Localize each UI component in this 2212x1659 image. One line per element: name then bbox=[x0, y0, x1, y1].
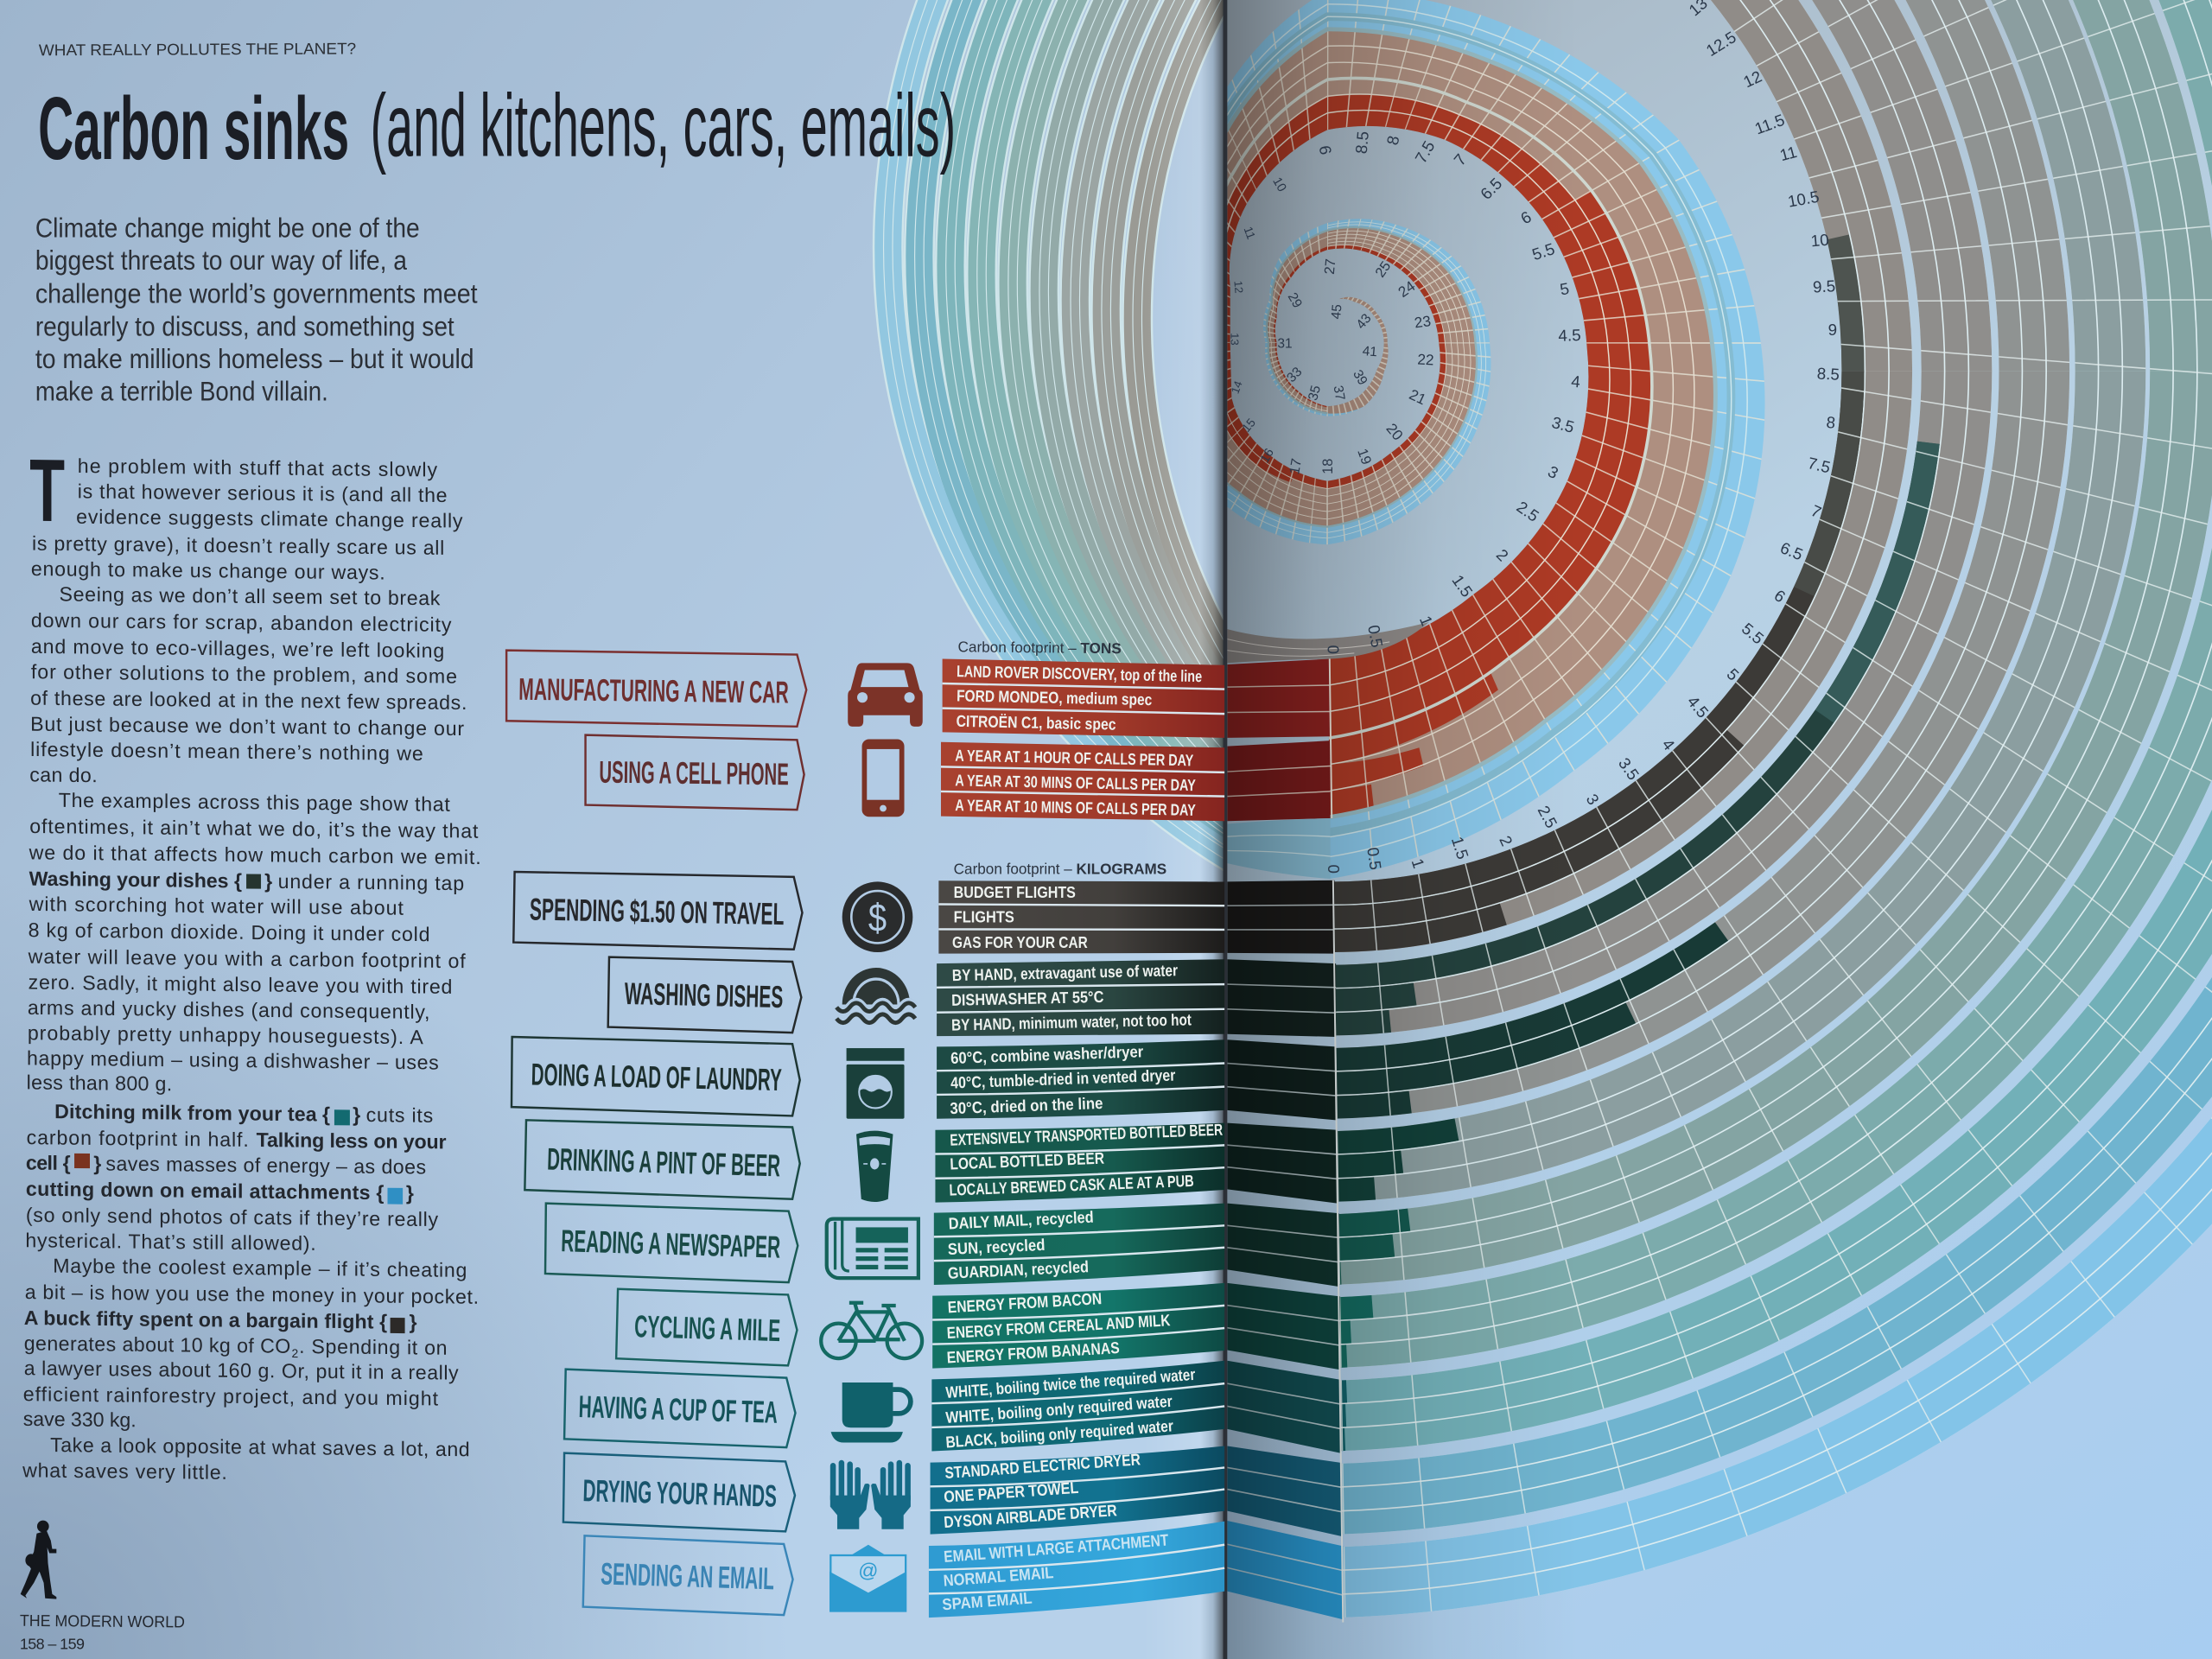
row: washing dishes bbox=[937, 959, 1224, 1036]
body text column: is that however serious it is (and all the bbox=[78, 480, 448, 506]
scale numbers: tons: 20 bbox=[1382, 420, 1407, 443]
body text column: evidence suggests climate change really bbox=[76, 505, 463, 532]
label bars bbox=[929, 658, 1224, 1618]
scale numbers: kilograms bbox=[1325, 0, 1840, 874]
scale numbers: tons: 12 bbox=[1231, 280, 1246, 294]
icon: email envelope: @ bbox=[858, 1559, 878, 1581]
row: tea bbox=[931, 1361, 1224, 1452]
intro text: challenge the world’s governments meet bbox=[35, 277, 478, 308]
row: hands: DYSON AIRBLADE DRYER bbox=[944, 1501, 1118, 1531]
body text column: { bbox=[376, 1181, 384, 1204]
scale numbers: kilograms: 7.5 bbox=[1806, 454, 1832, 476]
scale numbers: tons: 7 bbox=[1450, 150, 1470, 169]
row: email: SPAM EMAIL bbox=[942, 1589, 1033, 1613]
row: cycling bbox=[932, 1283, 1224, 1369]
intro text: make a terrible Bond villain. bbox=[35, 376, 328, 407]
scale numbers: tons: 45 bbox=[1329, 303, 1344, 320]
row: tea: WHITE, boiling twice the required water bbox=[945, 1365, 1197, 1402]
body text column: a bit – is how you use the money in your pocket. bbox=[25, 1281, 479, 1308]
scale numbers: tons: 24 bbox=[1395, 276, 1419, 301]
body text column: cutting down on email attachments bbox=[26, 1178, 371, 1204]
title: (and kitchens, cars, emails) bbox=[371, 76, 956, 175]
sign: hands: DRYING YOUR HANDS bbox=[582, 1472, 777, 1514]
scale numbers: tons: 6 bbox=[1517, 207, 1535, 227]
drop cap: T bbox=[29, 441, 65, 540]
bars: tons rows between spine and zero bbox=[1227, 622, 1429, 879]
bar fade near the top of long bars bbox=[1794, 372, 1940, 722]
body text column: for other solutions to the problem, and some bbox=[31, 660, 457, 688]
tick lines: tons spiral bbox=[975, 0, 1680, 696]
row: spending on travel: FLIGHTS bbox=[954, 907, 1014, 925]
body text column: Maybe the coolest example – if it’s cheating bbox=[53, 1255, 467, 1281]
scale numbers: tons: 0 bbox=[1324, 645, 1342, 654]
intro text: biggest threats to our way of life, a bbox=[35, 245, 407, 276]
sign: laundry bbox=[512, 1037, 800, 1116]
row: manufacturing a new car bbox=[943, 658, 1224, 738]
scale numbers: kilograms: 12 bbox=[1740, 67, 1764, 91]
scale numbers: kilograms: 9.5 bbox=[1812, 276, 1836, 296]
body text column bbox=[22, 441, 481, 1486]
scale numbers: kilograms: 11 bbox=[1777, 143, 1799, 164]
scale numbers: tons: 33 bbox=[1284, 365, 1305, 385]
sign: email: SENDING AN EMAIL bbox=[601, 1555, 775, 1596]
row: hands: ONE PAPER TOWEL bbox=[944, 1478, 1079, 1506]
row: newspaper: DAILY MAIL, recycled bbox=[948, 1208, 1094, 1233]
chart: kilogram rings, lower arcs bbox=[1334, 371, 2212, 1618]
bars: kilogram values bbox=[1334, 372, 1940, 1452]
sign: tea: HAVING A CUP OF TEA bbox=[578, 1389, 778, 1430]
scale numbers: tons: 10 bbox=[1269, 175, 1288, 194]
icon: hands bbox=[830, 1460, 911, 1529]
icon: car bbox=[848, 663, 923, 727]
body text column: } bbox=[264, 870, 272, 893]
sign: manufacturing a new car bbox=[506, 651, 806, 727]
body text column: { bbox=[322, 1103, 330, 1126]
icon: bicycle bbox=[821, 1303, 922, 1358]
row: email: EMAIL WITH LARGE ATTACHMENT bbox=[943, 1530, 1169, 1566]
row: email: NORMAL EMAIL bbox=[943, 1563, 1054, 1590]
body text column: oftentimes, it ain’t what we do, it’s the way that bbox=[29, 815, 479, 842]
body text column: saves masses of energy – as does bbox=[105, 1152, 426, 1179]
body text column: efficient rainforestry project, and you might bbox=[23, 1382, 439, 1409]
body text column: Take a look opposite at what saves a lot, and bbox=[50, 1433, 470, 1460]
row: newspaper: SUN, recycled bbox=[947, 1236, 1046, 1258]
body text column: Washing your dishes bbox=[29, 868, 228, 892]
body text column: zero. Sadly, it might also leave you with tired bbox=[29, 971, 452, 998]
scale numbers: kilograms: 8 bbox=[1826, 413, 1836, 432]
row: washing dishes: BY HAND, minimum water, not too hot bbox=[951, 1010, 1192, 1034]
scale numbers: kilograms: 0 bbox=[1325, 864, 1343, 874]
row: manufacturing a new car: CITROËN C1, basic spec bbox=[956, 712, 1116, 734]
row: using a cell phone: A YEAR AT 1 HOUR OF CALLS PER DAY bbox=[955, 747, 1194, 769]
body text column: we do it that affects how much carbon we emit. bbox=[29, 841, 481, 868]
bars: red tons values bbox=[1211, 94, 1652, 817]
body text column: (so only send photos of cats if they’re really bbox=[26, 1204, 439, 1230]
body text column: { bbox=[63, 1152, 71, 1174]
tick lines: kilogram rings bbox=[1334, 0, 2212, 1618]
body text column: what saves very little. bbox=[22, 1459, 227, 1484]
scale numbers: tons: 2.5 bbox=[1513, 498, 1542, 525]
scale numbers: tons: 18 bbox=[1320, 459, 1336, 474]
body text column: hysterical. That’s still allowed). bbox=[25, 1229, 316, 1255]
scale numbers: tons: 0.5 bbox=[1364, 624, 1386, 649]
scale numbers: kilograms: 12.5 bbox=[1703, 28, 1739, 60]
row: laundry: 60°C, combine washer/dryer bbox=[950, 1042, 1144, 1067]
row: tea: WHITE, boiling only required water bbox=[945, 1392, 1173, 1427]
scale numbers: tons: 37 bbox=[1331, 385, 1347, 402]
scale numbers: tons: 31 bbox=[1277, 337, 1293, 352]
chart: right page spiral bbox=[1227, 0, 2212, 1659]
row: hands bbox=[931, 1446, 1224, 1535]
scale numbers: tons: 2 bbox=[1493, 545, 1512, 564]
scale numbers: kilograms: 5.5 bbox=[1738, 620, 1767, 647]
body text column: and move to eco-villages, we’re left looking bbox=[31, 635, 444, 662]
body text column: of these are looked at in the next few spreads. bbox=[30, 687, 467, 714]
body text column: { bbox=[379, 1311, 387, 1333]
title bbox=[38, 76, 956, 178]
scale numbers: tons: 8.5 bbox=[1352, 130, 1372, 155]
body text column: Talking less on your bbox=[257, 1128, 447, 1153]
scale numbers: tons: 16 bbox=[1258, 447, 1277, 466]
scale numbers: kilograms: 4 bbox=[1658, 735, 1678, 753]
scale numbers: tons: 3.5 bbox=[1550, 413, 1576, 436]
body text column: A buck fifty spent on a bargain flight bbox=[24, 1306, 374, 1332]
body text column: Seeing as we don’t all seem set to break bbox=[60, 582, 441, 609]
body text column: } bbox=[409, 1311, 417, 1333]
signs bbox=[506, 651, 806, 1615]
scale numbers: tons: 4 bbox=[1571, 372, 1581, 391]
ring lines: tons spiral bbox=[1184, 4, 1747, 857]
scale numbers: tons: 15 bbox=[1239, 416, 1258, 435]
scale numbers: kilograms: 1 bbox=[1408, 856, 1428, 870]
body text column: } bbox=[93, 1152, 101, 1174]
body text column: under a running tap bbox=[278, 870, 464, 894]
sign: beer: DRINKING A PINT OF BEER bbox=[547, 1141, 781, 1183]
scale numbers: kilograms: 10.5 bbox=[1786, 188, 1821, 211]
scale numbers: kilograms: 5 bbox=[1723, 664, 1743, 684]
scale numbers: kilograms: 3.5 bbox=[1615, 754, 1643, 784]
swatch: flight bbox=[391, 1318, 405, 1333]
row: beer bbox=[935, 1121, 1224, 1203]
sign: hands bbox=[563, 1453, 795, 1531]
scale numbers: tons: 39 bbox=[1350, 367, 1370, 388]
body text column: enough to make us change our ways. bbox=[31, 557, 385, 584]
scale numbers: kilograms: 6 bbox=[1771, 586, 1789, 606]
icon: dish in water bbox=[836, 968, 915, 1023]
header: carbon footprint tons: Carbon footprint – TONS bbox=[958, 638, 1122, 657]
body text column: with scorching hot water will use about bbox=[29, 893, 404, 919]
footer: page numbers: 158 – 159 bbox=[20, 1636, 85, 1653]
scale numbers: kilograms: 6.5 bbox=[1777, 538, 1805, 563]
row: laundry: 30°C, dried on the line bbox=[950, 1094, 1103, 1117]
icon: walking man bbox=[21, 1521, 56, 1599]
scale numbers: kilograms: 11.5 bbox=[1752, 111, 1787, 138]
body text column: 2 bbox=[291, 1346, 298, 1360]
scale numbers: kilograms: 0.5 bbox=[1363, 846, 1385, 871]
sign: beer bbox=[524, 1120, 800, 1199]
row: newspaper: GUARDIAN, recycled bbox=[947, 1257, 1089, 1282]
body text column: a lawyer uses about 160 g. Or, put it in a really bbox=[24, 1357, 459, 1384]
sign: email bbox=[583, 1535, 793, 1615]
scale numbers: tons: 1 bbox=[1416, 613, 1436, 628]
scale numbers: tons: 35 bbox=[1306, 384, 1324, 402]
row: manufacturing a new car: FORD MONDEO, medium spec bbox=[957, 686, 1153, 709]
bars: kilogram rows between spine and zero bbox=[1227, 880, 1343, 1623]
sign: laundry: DOING A LOAD OF LAUNDRY bbox=[531, 1057, 782, 1097]
scale numbers: tons: 5 bbox=[1559, 279, 1571, 299]
body text column: } bbox=[406, 1182, 414, 1205]
body text column: { bbox=[234, 869, 242, 892]
body text column: happy medium – using a dishwasher – uses bbox=[27, 1046, 439, 1074]
row: hands: STANDARD ELECTRIC DRYER bbox=[944, 1450, 1141, 1482]
background: right page bbox=[1226, 0, 2212, 1659]
swatch: tea bbox=[334, 1109, 350, 1125]
sign: washing dishes bbox=[608, 957, 801, 1033]
scale numbers: tons: 17 bbox=[1287, 457, 1305, 475]
row: spending on travel bbox=[938, 880, 1224, 954]
scale numbers: tons: 27 bbox=[1322, 258, 1338, 275]
scale numbers: kilograms: 10 bbox=[1810, 231, 1829, 250]
body text column: carbon footprint in half. bbox=[27, 1126, 249, 1151]
sign: tea bbox=[564, 1370, 795, 1447]
sign: manufacturing a new car: MANUFACTURING A NEW CAR bbox=[518, 671, 789, 710]
body text column: water will leave you with a carbon footprint of bbox=[28, 945, 466, 972]
spine shadow on chart bbox=[1227, 0, 1580, 1659]
icon: coin: $ bbox=[868, 896, 887, 940]
scale numbers: tons: 19 bbox=[1354, 447, 1374, 467]
body text column: generates about 10 kg of CO bbox=[24, 1332, 290, 1357]
row: using a cell phone: A YEAR AT 10 MINS OF CALLS PER DAY bbox=[955, 796, 1196, 819]
scale numbers: tons: 11 bbox=[1242, 225, 1259, 241]
body text column: The examples across this page show that bbox=[59, 789, 450, 816]
scale numbers: tons: 43 bbox=[1354, 311, 1375, 332]
kicker: WHAT REALLY POLLUTES THE PLANET? bbox=[39, 39, 356, 59]
header: carbon footprint kilograms: Carbon footprint – KILOGRAMS bbox=[954, 861, 1166, 878]
scale numbers: tons: 3 bbox=[1545, 462, 1561, 482]
icon: cup of tea bbox=[831, 1382, 911, 1443]
scale numbers: tons bbox=[1229, 130, 1581, 654]
row: washing dishes: DISHWASHER AT 55°C bbox=[951, 988, 1104, 1009]
body text column: save 330 kg. bbox=[23, 1408, 137, 1431]
body text column: } bbox=[353, 1103, 360, 1126]
body text column: cell bbox=[26, 1151, 58, 1174]
icon: newspaper bbox=[827, 1219, 918, 1278]
scale numbers: tons: 21 bbox=[1407, 385, 1429, 408]
chart: kilogram rings, upper arcs bbox=[1711, 0, 2212, 372]
scale numbers: tons: 14 bbox=[1229, 379, 1245, 396]
sign: cycling bbox=[616, 1289, 797, 1365]
row: beer: LOCAL BOTTLED BEER bbox=[950, 1149, 1105, 1173]
row: spending on travel: BUDGET FLIGHTS bbox=[954, 883, 1076, 901]
icon: coin bbox=[842, 881, 912, 952]
icon: washing machine bbox=[847, 1048, 905, 1119]
scale numbers: tons: 41 bbox=[1362, 344, 1378, 359]
icon: pint of beer bbox=[856, 1131, 893, 1202]
row: cycling: ENERGY FROM BANANAS bbox=[946, 1338, 1120, 1366]
swatch: dishes bbox=[246, 874, 261, 889]
row: email bbox=[929, 1522, 1224, 1618]
scale numbers: tons: 25 bbox=[1372, 258, 1394, 280]
scale numbers: tons: 29 bbox=[1285, 290, 1305, 310]
scale numbers: kilograms: 7 bbox=[1808, 501, 1824, 522]
body text column: arms and yucky dishes (and consequently, bbox=[28, 996, 429, 1023]
swatch: email bbox=[387, 1188, 403, 1205]
scale numbers: tons: 7.5 bbox=[1411, 137, 1439, 166]
background: left page bbox=[0, 0, 1226, 1659]
scale numbers: tons: 22 bbox=[1417, 351, 1434, 368]
icon: phone bbox=[862, 740, 905, 817]
icon: email envelope bbox=[830, 1545, 906, 1611]
scale numbers: kilograms: 3 bbox=[1583, 791, 1603, 808]
row: spending on travel: GAS FOR YOUR CAR bbox=[952, 933, 1088, 951]
body text column: Ditching milk from your tea bbox=[54, 1100, 318, 1125]
scale numbers: tons: 9 bbox=[1316, 144, 1335, 156]
sign: spending on travel bbox=[513, 872, 802, 950]
body text column: he problem with stuff that acts slowly bbox=[78, 454, 438, 481]
row: manufacturing a new car: LAND ROVER DISCOVERY, top of the line bbox=[957, 662, 1202, 685]
row: newspaper bbox=[934, 1204, 1224, 1285]
scale numbers: kilograms: 9 bbox=[1828, 321, 1837, 339]
scale numbers: kilograms: 8.5 bbox=[1816, 364, 1840, 384]
row: using a cell phone bbox=[941, 742, 1224, 821]
scale numbers: tons: 23 bbox=[1414, 312, 1432, 331]
body text column: less than 800 g. bbox=[27, 1071, 172, 1095]
body text column: 8 kg of carbon dioxide. Doing it under cold bbox=[29, 918, 429, 945]
row: beer: EXTENSIVELY TRANSPORTED BOTTLED BEER bbox=[950, 1121, 1224, 1149]
chart: spiral continuation on left page bbox=[873, 0, 1224, 871]
sign: washing dishes: WASHING DISHES bbox=[624, 976, 784, 1014]
scale numbers: kilograms: 1.5 bbox=[1448, 835, 1472, 861]
scale numbers: kilograms: 2.5 bbox=[1535, 803, 1560, 831]
body text column: probably pretty unhappy houseguests). A bbox=[28, 1021, 423, 1048]
tan tracks bbox=[1227, 31, 1713, 805]
body text column: is pretty grave), it doesn’t really scare us all bbox=[32, 532, 444, 559]
swatch: cell bbox=[74, 1154, 90, 1168]
body text column: . Spending it on bbox=[299, 1335, 448, 1359]
scale numbers: kilograms: 4.5 bbox=[1684, 692, 1712, 721]
sign: newspaper: READING A NEWSPAPER bbox=[561, 1223, 781, 1265]
title: Carbon sinks bbox=[38, 79, 349, 178]
body text column: down our cars for scrap, abandon electricity bbox=[31, 609, 452, 636]
intro text: Climate change might be one of the bbox=[35, 212, 420, 243]
scale numbers: tons: 5.5 bbox=[1529, 239, 1557, 264]
body text column: lifestyle doesn’t mean there’s nothing we bbox=[30, 738, 423, 765]
footer: section name: THE MODERN WORLD bbox=[20, 1611, 185, 1630]
row: laundry bbox=[937, 1039, 1224, 1119]
body text column: But just because we don’t want to change our bbox=[30, 713, 464, 740]
sign: spending on travel: SPENDING $1.50 ON TRAVEL bbox=[530, 891, 785, 931]
scale numbers: tons: 4.5 bbox=[1558, 326, 1581, 345]
row: cycling: ENERGY FROM BACON bbox=[947, 1289, 1103, 1316]
row: laundry: 40°C, tumble-dried in vented dryer bbox=[950, 1065, 1176, 1092]
body text column: can do. bbox=[29, 763, 98, 786]
row: using a cell phone: A YEAR AT 30 MINS OF CALLS PER DAY bbox=[955, 771, 1196, 794]
row: washing dishes: BY HAND, extravagant use of water bbox=[952, 961, 1179, 984]
scale numbers: tons: 13 bbox=[1229, 333, 1242, 346]
row: tea: BLACK, boiling only required water bbox=[945, 1416, 1174, 1452]
intro text: to make millions homeless – but it would bbox=[35, 343, 474, 374]
intro text bbox=[35, 212, 478, 407]
scale numbers: tons: 6.5 bbox=[1477, 175, 1505, 203]
scale numbers: kilograms: 2 bbox=[1496, 833, 1516, 849]
sign: newspaper bbox=[545, 1204, 798, 1282]
spine bbox=[1142, 0, 1227, 1659]
sign: cycling: CYCLING A MILE bbox=[634, 1308, 781, 1348]
row: beer: LOCALLY BREWED CASK ALE AT A PUB bbox=[949, 1172, 1194, 1199]
scale numbers: tons: 8 bbox=[1383, 134, 1402, 147]
scale numbers: tons: 1.5 bbox=[1448, 571, 1476, 601]
intro text: regularly to discuss, and something set bbox=[35, 311, 454, 342]
body text column: cuts its bbox=[366, 1103, 433, 1127]
sign: using a cell phone bbox=[586, 735, 804, 810]
sign: using a cell phone: USING A CELL PHONE bbox=[599, 754, 789, 791]
row: cycling: ENERGY FROM CEREAL AND MILK bbox=[946, 1311, 1171, 1342]
chart: tons spiral track bbox=[1227, 0, 1764, 879]
